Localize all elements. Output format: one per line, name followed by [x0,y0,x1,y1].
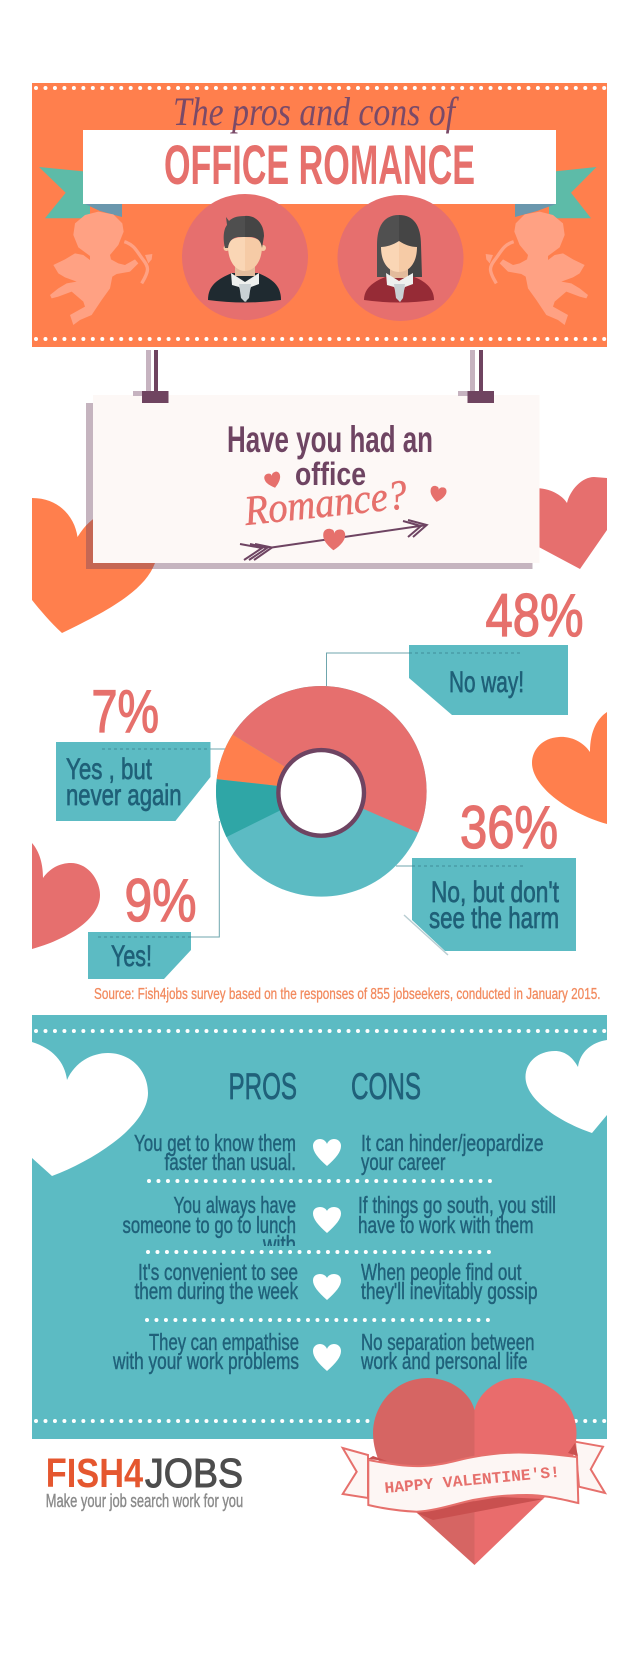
logo: fish4jobs: Make your job search work for you [46,1491,243,1511]
ribbon: right [515,167,596,218]
row 1: your career [361,1149,446,1175]
icon: man portrait [182,194,308,320]
logo: fish4jobs [46,1450,243,1511]
row 3: they'll inevitably gossip [361,1278,538,1304]
row 4 [112,1329,534,1374]
subtitle script: The pros and cons of [173,89,459,134]
banner text: HAPPY VALENTINE'S! [384,1464,561,1498]
small hearts [263,471,447,503]
row 3: them during the week [134,1278,298,1304]
row 4: They can empathise [149,1329,299,1355]
heart: orange left [32,498,155,633]
heart: white left [32,1042,148,1176]
sign question text: office [295,456,366,492]
row 1 [134,1130,544,1175]
arrow with heart [240,520,427,560]
panel: pros and cons [32,1015,607,1439]
row 3: It's convenient to see [138,1259,298,1285]
row 2 [122,1196,555,1246]
row 3 [134,1259,538,1304]
callout: 7% yes but never again [56,678,225,821]
callout: 7% yes but never again: 7% [92,678,159,745]
row 3: When people find out [361,1259,522,1285]
row 2: with [262,1231,296,1257]
sign question text: Romance? [241,472,409,535]
callout: 36% no but don't see the harm: see the harm [429,902,559,935]
hanging sign [86,350,540,569]
title white bar [83,130,556,204]
callout: 9% yes: 9% [124,867,196,934]
sign question text [227,419,433,535]
row 1: faster than usual. [164,1149,296,1175]
row 1: It can hinder/jeopardize [361,1130,544,1156]
row 2: If things go south, you still [358,1192,556,1218]
row 2: have to work with them [358,1212,534,1238]
cupid: right [486,212,588,325]
sign question text: Have you had an [227,419,433,460]
heart: orange right [532,712,607,824]
callout: 48% no way [326,582,584,715]
header banner [32,83,607,347]
heading: pros: PROS [228,1066,297,1107]
banner band [368,1452,578,1512]
callout: 9% yes [88,821,219,979]
heading: cons: CONS [351,1066,421,1107]
cupid: left [50,212,152,325]
callout: 36% no but don't see the harm: 36% [460,794,558,861]
logo: fish4jobs: JOBS [145,1450,243,1496]
row 4: work and personal life [360,1348,528,1374]
callout: 7% yes but never again: Yes , but [66,753,152,786]
sign poles [146,350,483,391]
callout: 48% no way: 48% [486,582,584,649]
callout: 7% yes but never again: never again [66,779,182,812]
row 2: someone to go to lunch [122,1212,296,1238]
ribbon: left [39,167,122,218]
heart: coral left [32,843,100,949]
sign clips [133,391,494,403]
icon: woman portrait [338,195,464,321]
heart: white right [526,1040,607,1133]
row 4: No separation between [361,1329,534,1355]
heart: coral right [535,477,607,569]
row 2: You always have [174,1192,296,1218]
banner tails [343,1442,605,1498]
heart with valentine banner [343,1378,605,1565]
callout: 9% yes: Yes! [111,940,152,973]
callout: 36% no but don't see the harm [396,794,576,955]
row 4: with your work problems [112,1348,299,1374]
callout: 36% no but don't see the harm: No, but don't [431,876,559,909]
logo: fish4jobs: FISH4 [46,1450,143,1496]
chart: donut [216,686,427,897]
row 1: You get to know them [134,1130,296,1156]
callout: 48% no way: No way! [449,666,524,699]
